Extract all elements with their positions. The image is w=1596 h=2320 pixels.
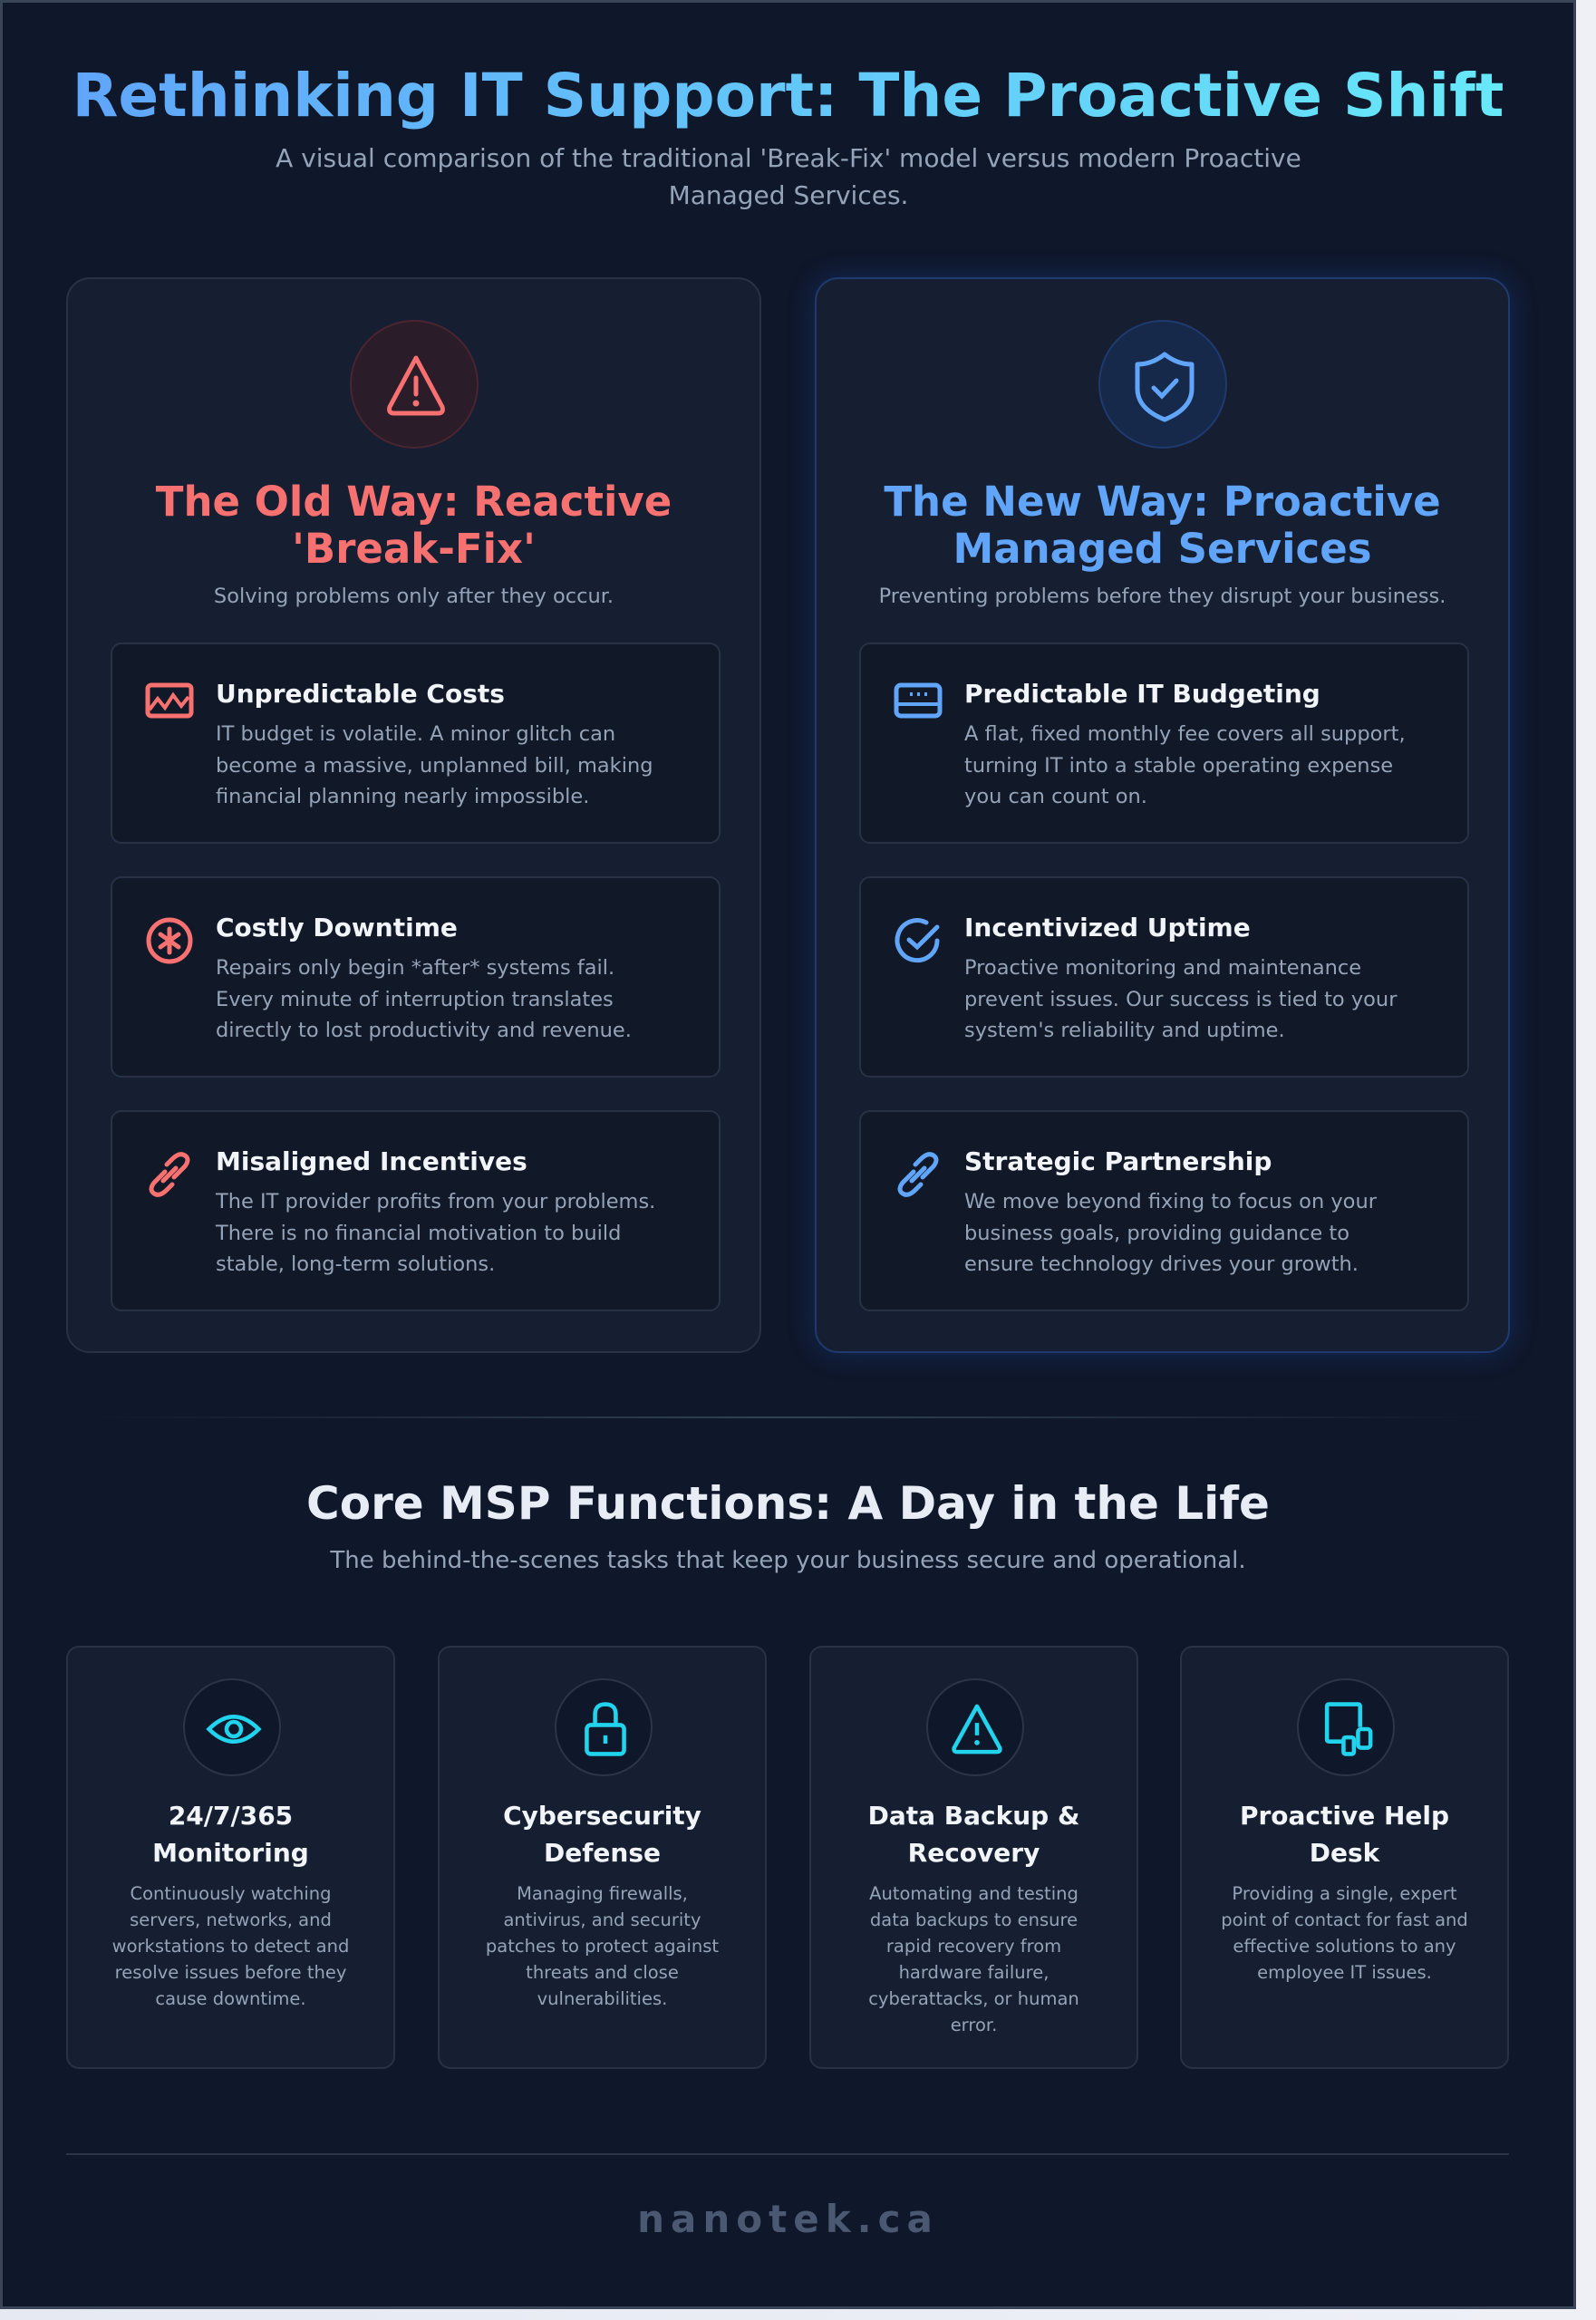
item: strategic partnership: Strategic Partnership <box>964 1146 1272 1176</box>
card: backup: Automating and testing data backups to ensure rapid recovery from hardware failure, cyberattacks, or human error. <box>868 1883 1079 2035</box>
item: costly downtime <box>111 876 721 1078</box>
card: cybersecurity: Cybersecurity <box>503 1801 701 1831</box>
card: monitoring: Monitoring <box>152 1838 309 1868</box>
item: misaligned incentives: Misaligned Incentives <box>216 1146 527 1176</box>
card: help desk: Desk <box>1310 1838 1379 1868</box>
item: misaligned incentives: The IT provider profits from your problems. There is no financial motivation to build stable, long-term solutions. <box>216 1190 655 1276</box>
heading <box>884 478 1441 573</box>
item: misaligned incentives <box>111 1110 721 1311</box>
item: incentivized uptime <box>859 876 1469 1078</box>
footer: nanotek.ca <box>637 2197 939 2241</box>
icon: lock <box>555 1678 653 1776</box>
item: predictable budgeting <box>859 643 1469 844</box>
title: Rethinking IT Support: The Proactive Shift <box>73 61 1504 130</box>
item: predictable budgeting: A flat, fixed monthly fee covers all support, turning IT into a stable operating expense you can count on. <box>964 722 1406 808</box>
card: help desk <box>1180 1646 1509 2069</box>
card: monitoring: 24/7/365 <box>169 1801 293 1831</box>
heading: The New Way: Proactive <box>884 478 1441 526</box>
section subtitle: The behind-the-scenes tasks that keep your business secure and operational. <box>330 1547 1246 1574</box>
item: unpredictable costs: Unpredictable Costs <box>216 679 505 709</box>
heading: 'Break-Fix' <box>292 525 536 573</box>
card: monitoring: Continuously watching servers, networks, and workstations to detect and resolve issues before they cause downtime. <box>112 1883 349 2009</box>
heading: The Old Way: Reactive <box>156 478 672 526</box>
panel: old way <box>66 277 761 1353</box>
subtitle: A visual comparison of the traditional 'Break-Fix' model versus modern Proactive Managed Services. <box>276 143 1301 210</box>
card: help desk: Providing a single, expert point of contact for fast and effective solutions to any employee IT issues. <box>1221 1883 1468 1983</box>
card: cybersecurity: Defense <box>544 1838 661 1868</box>
icon: shield <box>1098 320 1227 449</box>
icon: warning <box>350 320 479 449</box>
subheading: Solving problems only after they occur. <box>214 585 614 608</box>
heading: Managed Services <box>953 525 1372 573</box>
icon: warning <box>926 1678 1024 1776</box>
subheading: Preventing problems before they disrupt your business. <box>879 585 1446 608</box>
item: predictable budgeting: Predictable IT Budgeting <box>964 679 1320 709</box>
item: unpredictable costs <box>111 643 721 844</box>
item: costly downtime: Repairs only begin *after* systems fail. Every minute of interruption translates directly to lost productivity and revenue. <box>216 956 632 1042</box>
section title: Core MSP Functions: A Day in the Life <box>306 1477 1270 1530</box>
icon: devices <box>1297 1678 1395 1776</box>
item: strategic partnership <box>859 1110 1469 1311</box>
card: help desk: Proactive Help <box>1240 1801 1449 1831</box>
icon: eye <box>183 1678 281 1776</box>
heading <box>156 478 672 573</box>
card: monitoring <box>66 1646 395 2069</box>
panel: new way <box>815 277 1510 1353</box>
card: cybersecurity: Managing firewalls, antivirus, and security patches to protect against threats and close vulnerabilities. <box>486 1883 719 2009</box>
card: backup: Data Backup & <box>868 1801 1079 1831</box>
item: unpredictable costs: IT budget is volatile. A minor glitch can become a massive, unplanned bill, making financial planning nearly impossible. <box>216 722 653 808</box>
card: cybersecurity <box>438 1646 767 2069</box>
item: strategic partnership: We move beyond fixing to focus on your business goals, providing guidance to ensure technology drives your growth. <box>964 1190 1377 1276</box>
card: backup <box>809 1646 1138 2069</box>
item: incentivized uptime: Incentivized Uptime <box>964 913 1251 942</box>
item: costly downtime: Costly Downtime <box>216 913 458 942</box>
card: backup: Recovery <box>908 1838 1040 1868</box>
item: incentivized uptime: Proactive monitoring and maintenance prevent issues. Our success is tied to your system's reliability and uptime. <box>964 956 1397 1042</box>
